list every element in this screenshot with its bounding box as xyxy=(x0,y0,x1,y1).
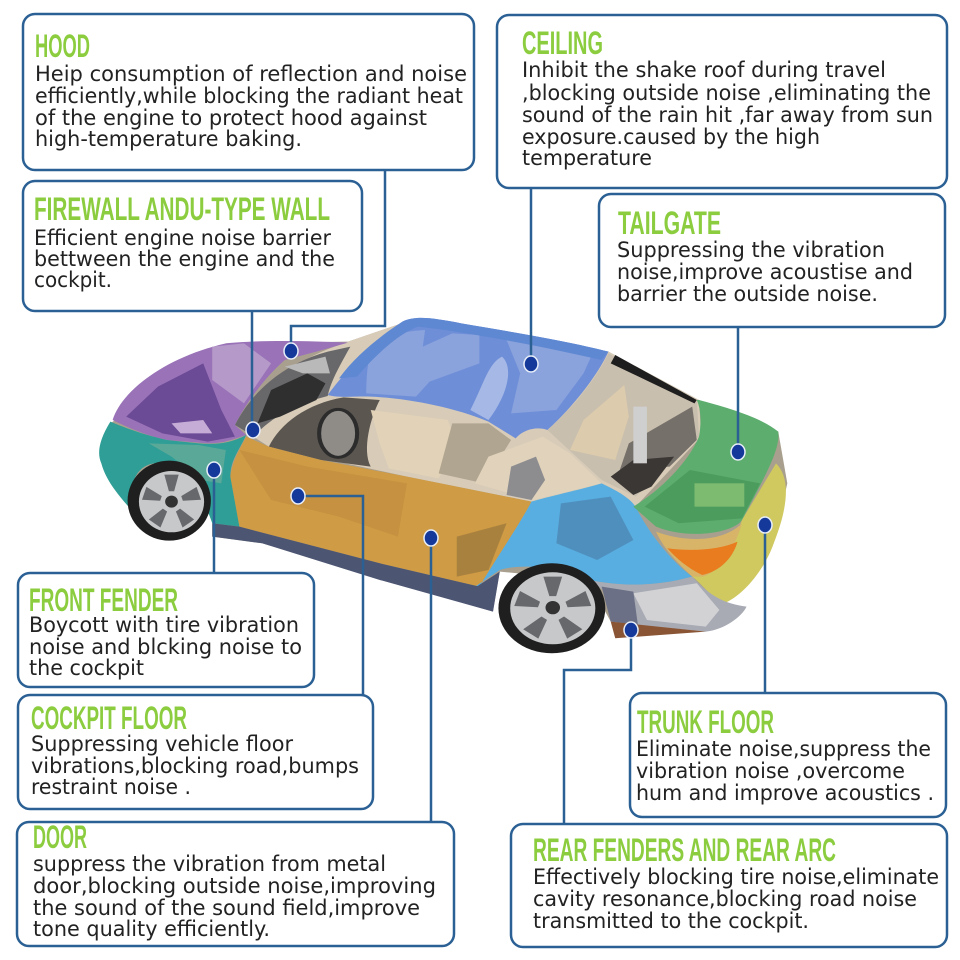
text: trunk floor description xyxy=(636,737,934,806)
rear quarter interior xyxy=(547,353,699,497)
rear fender panel xyxy=(473,483,692,588)
text: hood description: efficiently,while blocking the radiant heat xyxy=(35,84,463,109)
panel: hood xyxy=(23,14,474,170)
car illustration xyxy=(99,318,787,653)
text: trunk floor description: hum and improve acoustics . xyxy=(636,781,934,806)
trunk floor side panel xyxy=(692,463,786,603)
text: ceiling description: Inhibit the shake roof during travel xyxy=(522,58,886,83)
hood panel xyxy=(113,341,348,443)
tailgate panel xyxy=(633,400,778,534)
panel: cockpit floor xyxy=(18,695,373,809)
text: firewall description: bettween the engine and the xyxy=(34,247,335,272)
panel: firewall and u-type wall xyxy=(23,181,362,311)
text: firewall description: cockpit. xyxy=(34,268,112,293)
text: cockpit floor description: restraint noise . xyxy=(31,775,191,800)
text: hood description: high-temperature baking. xyxy=(35,127,302,152)
panel: trunk floor xyxy=(630,693,946,817)
sill xyxy=(212,523,500,612)
text: front fender description xyxy=(29,613,302,681)
text: trunk floor description: vibration noise ,overcome xyxy=(636,759,905,784)
heading: hood: HOOD xyxy=(35,28,90,64)
text: door description xyxy=(33,852,436,942)
heading: front fender: FRONT FENDER xyxy=(29,582,178,618)
text: ceiling description: ,blocking outside noise ,eliminating the xyxy=(522,81,931,106)
panel: rear fenders and rear arc xyxy=(511,824,947,947)
text: rear fenders description xyxy=(533,865,939,934)
heading: trunk floor: TRUNK FLOOR xyxy=(637,704,774,740)
interior base xyxy=(235,318,701,507)
text: tailgate description: Suppressing the vibration xyxy=(617,238,885,263)
text: tailgate description: barrier the outside noise. xyxy=(617,282,878,307)
text: cockpit floor description xyxy=(31,732,359,800)
text: hood description: Heip consumption of reflection and noise xyxy=(35,62,467,87)
text: ceiling description: temperature xyxy=(522,146,652,171)
text: firewall description: Efficient engine noise barrier xyxy=(34,226,331,251)
heading: ceiling: CEILING xyxy=(522,25,603,61)
heading: tailgate: TAILGATE xyxy=(618,205,721,241)
text: door description: tone quality efficiently. xyxy=(33,917,270,942)
ceiling panel xyxy=(328,318,608,438)
text: rear fenders description: cavity resonance,blocking road noise xyxy=(533,887,917,912)
text: ceiling description xyxy=(522,58,933,171)
text: door description: the sound of the sound field,improve xyxy=(33,896,420,921)
text: rear fenders description: Effectively blocking tire noise,eliminate xyxy=(533,865,939,890)
text: hood description: of the engine to protect hood against xyxy=(35,106,427,131)
dashboard and front cabin xyxy=(269,397,380,467)
text: front fender description: noise and blcking noise to xyxy=(29,635,302,660)
panel: front fender xyxy=(18,573,314,687)
text: cockpit floor description: vibrations,blocking road,bumps xyxy=(31,754,359,779)
panel: door xyxy=(17,819,454,946)
panel: tailgate xyxy=(599,194,945,327)
rear underbody and exhaust xyxy=(588,577,747,632)
leader lines xyxy=(214,170,765,824)
front fender panel xyxy=(99,422,246,527)
heading: door: DOOR xyxy=(33,819,87,855)
text: tailgate description xyxy=(617,238,913,307)
text: front fender description: the cockpit xyxy=(29,656,144,681)
engine bay through windshield xyxy=(235,347,350,437)
text: ceiling description: exposure.caused by the high xyxy=(522,125,820,150)
panel: ceiling xyxy=(497,15,947,188)
text: ceiling description: sound of the rain hit ,far away from sun xyxy=(522,103,933,128)
text: firewall description xyxy=(34,226,335,293)
marker dots xyxy=(207,343,772,638)
heading: cockpit floor: COCKPIT FLOOR xyxy=(31,700,187,736)
front wheel xyxy=(128,461,211,541)
text: cockpit floor description: Suppressing vehicle floor xyxy=(31,732,293,757)
text: door description: suppress the vibration from metal xyxy=(33,852,386,877)
body underlay xyxy=(110,318,787,632)
text: door description: door,blocking outside noise,improving xyxy=(33,874,436,899)
cockpit floor and door panel xyxy=(230,437,531,587)
text: front fender description: Boycott with tire vibration xyxy=(29,613,299,638)
text: trunk floor description: Eliminate noise,suppress the xyxy=(636,737,931,762)
text: rear fenders description: transmitted to the cockpit. xyxy=(533,909,809,934)
text: tailgate description: noise,improve acoustise and xyxy=(617,260,913,285)
heading: firewall: FIREWALL ANDU-TYPE WALL xyxy=(34,191,330,227)
text: hood description xyxy=(35,62,467,152)
rear wheel xyxy=(498,563,605,653)
